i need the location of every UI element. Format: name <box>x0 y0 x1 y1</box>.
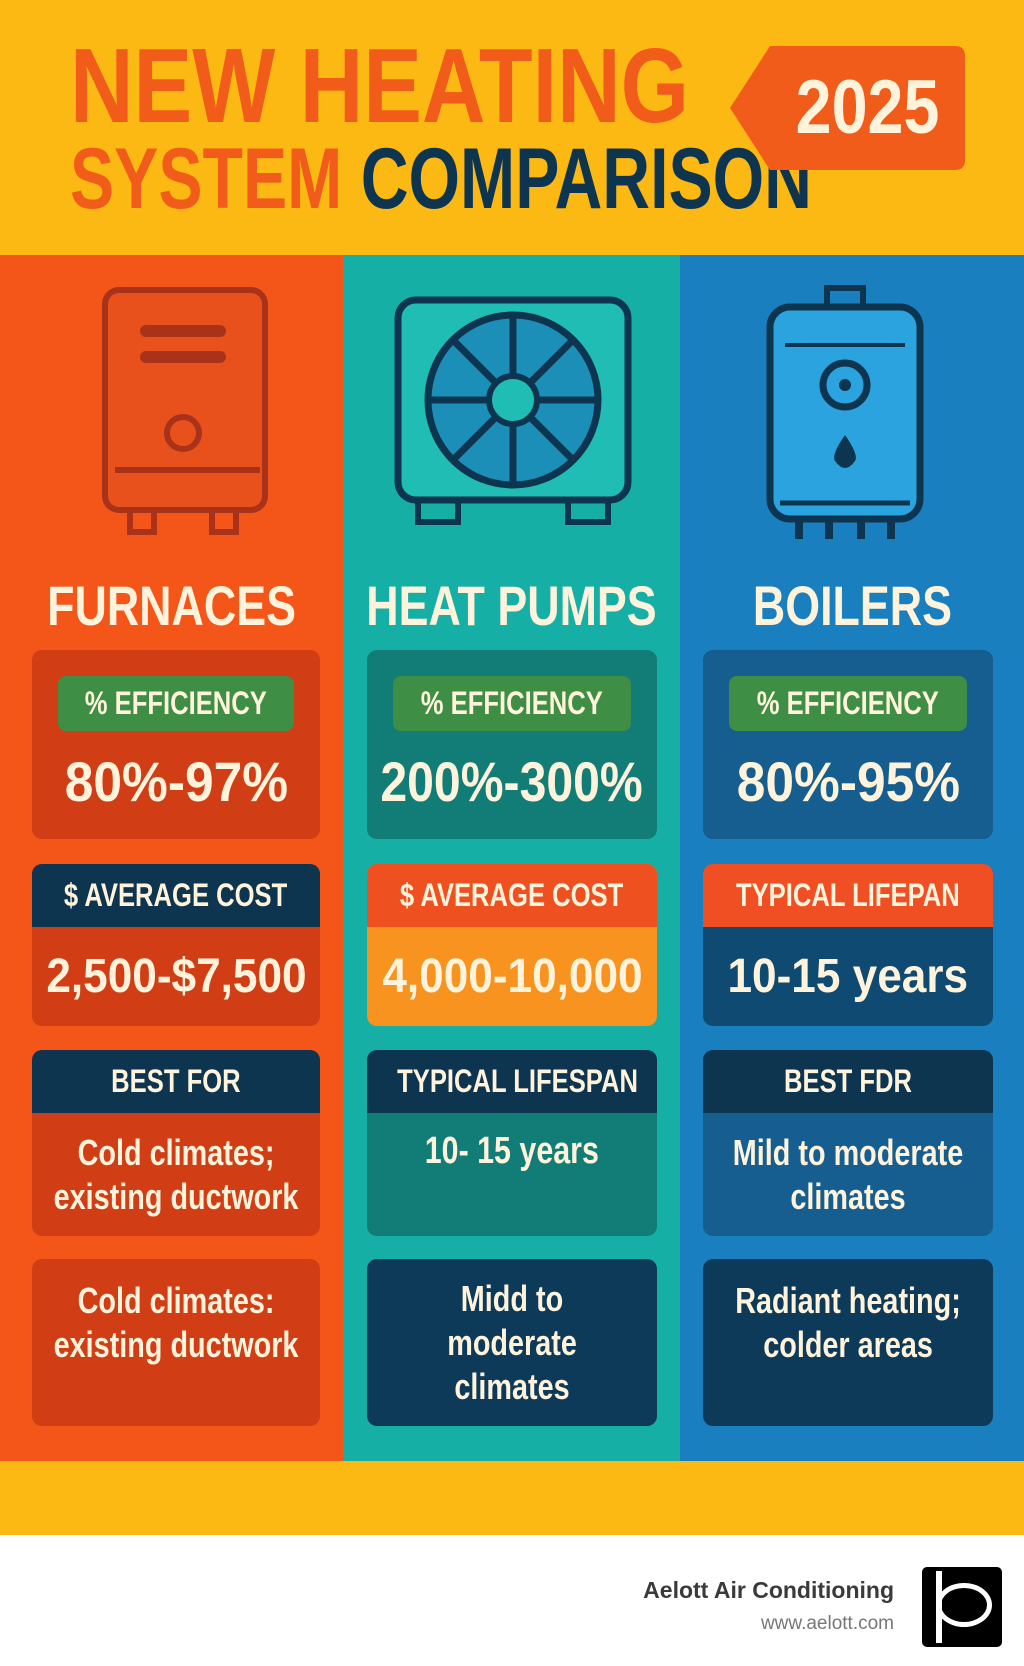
card: cost: 4,000-10,000 <box>382 950 642 1002</box>
card: efficiency <box>703 650 993 839</box>
card: lifespan: TYPICAL LIFEPAN <box>736 877 960 913</box>
icon: furnace <box>102 287 268 535</box>
card: best for: BEST FOR <box>111 1063 241 1099</box>
card: cost: 2,500-$7,500 <box>46 950 306 1002</box>
card: best for: Mild to moderate <box>733 1132 963 1172</box>
card: note: Cold climates: <box>78 1280 274 1320</box>
heading: boilers: BOILERS <box>752 574 952 637</box>
icon: boiler <box>766 285 924 539</box>
card: efficiency: % EFFICIENCY <box>421 685 603 721</box>
card: lifespan <box>703 864 993 1026</box>
card: cost: $ AVERAGE COST <box>64 877 288 913</box>
heading: furnaces: FURNACES <box>47 574 296 637</box>
card: climates: climates <box>454 1366 570 1406</box>
card: note: existing ductwork <box>54 1324 298 1364</box>
card: best for <box>32 1050 320 1236</box>
card: lifespan: 10-15 years <box>728 950 968 1002</box>
card: climates: moderate <box>447 1322 577 1362</box>
card: lifespan: 10- 15 years <box>425 1130 599 1172</box>
card: radiant <box>703 1259 993 1426</box>
card: efficiency <box>367 650 657 839</box>
card: efficiency: % EFFICIENCY <box>757 685 939 721</box>
badge: 2025: 2025 <box>796 65 939 150</box>
title <box>70 27 812 227</box>
logo <box>922 1567 1002 1647</box>
card: climates: Midd to <box>461 1278 563 1318</box>
card: efficiency: % EFFICIENCY <box>85 685 267 721</box>
company name: Aelott Air Conditioning <box>643 1577 894 1603</box>
card: efficiency <box>32 650 320 839</box>
card: efficiency: 80%-95% <box>736 750 960 813</box>
card: efficiency: 200%-300% <box>381 750 643 813</box>
card: radiant: Radiant heating; <box>735 1280 961 1320</box>
heading: heat pumps: HEAT PUMPS <box>366 574 657 637</box>
card: best for: existing ductwork <box>54 1176 298 1216</box>
badge: 2025 <box>730 46 965 170</box>
card: note <box>32 1259 320 1426</box>
title: NEW HEATING <box>70 27 689 145</box>
card: best for <box>703 1050 993 1236</box>
panel: furnaces <box>0 255 343 1461</box>
card: cost: $ AVERAGE COST <box>400 877 624 913</box>
panel: heat pumps <box>343 255 680 1461</box>
url: www.aelott.com <box>761 1613 894 1634</box>
icon: heat pump <box>394 296 632 525</box>
card: best for: climates <box>790 1176 906 1216</box>
panel: boilers <box>680 255 1024 1461</box>
card: efficiency: 80%-97% <box>64 750 288 813</box>
card: cost <box>32 864 320 1026</box>
card: cost <box>367 864 657 1026</box>
card: lifespan <box>367 1050 657 1236</box>
title: SYSTEM COMPARISON <box>70 131 812 227</box>
card: lifespan: TYPICAL LIFESPAN <box>397 1063 638 1099</box>
card: climates <box>367 1259 657 1426</box>
card: best for: BEST FDR <box>784 1063 912 1099</box>
footer <box>0 1535 1024 1666</box>
card: radiant: colder areas <box>763 1324 933 1364</box>
card: best for: Cold climates; <box>78 1132 274 1172</box>
